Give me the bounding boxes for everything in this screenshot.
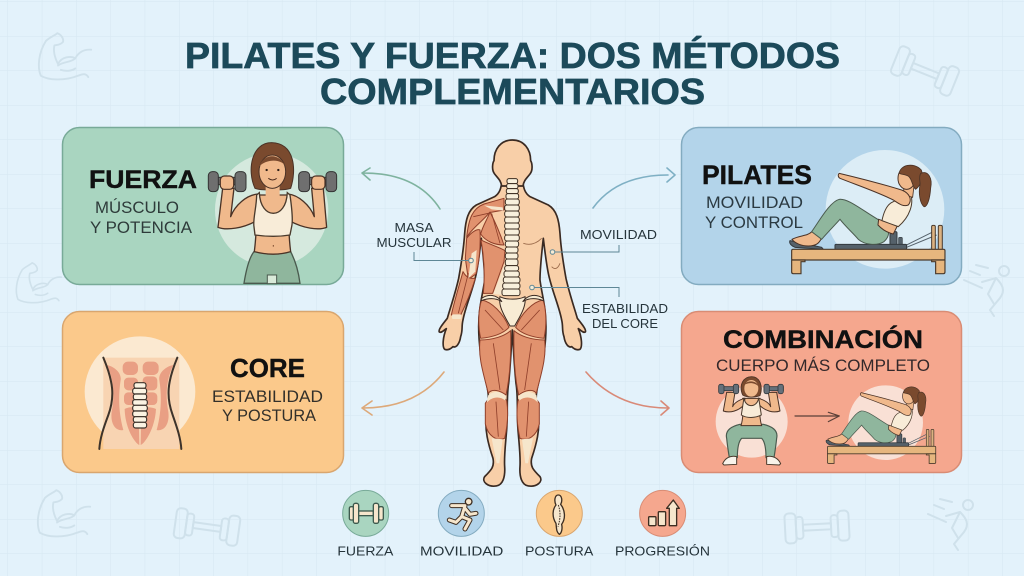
muscles: left back and arm [451,198,546,439]
central anatomy figure [439,140,586,486]
title: PILATES Y FUERZA: DOS MÉTODOS [185,35,840,76]
legend: movilidad [420,490,503,559]
text: estabilidad y postura: ESTABILIDAD [212,388,323,406]
panel: pilates [682,128,962,284]
text: estabilidad y postura [212,388,323,425]
tendons and bones highlights [452,205,538,463]
heading: fuerza: FUERZA [89,166,197,194]
illustration: squat and reformer sequence [716,377,936,465]
legend row [337,490,710,559]
label: estabilidad del core: ESTABILIDAD [582,301,668,316]
legend: progresión [615,490,710,559]
heading: core: CORE [230,353,305,383]
arrow: sequence [795,412,839,422]
text: movilidad y control: MOVILIDAD [706,194,803,212]
text: estabilidad y postura: Y POSTURA [222,407,316,425]
panel: fuerza [62,128,344,284]
figure: woman on reformer [826,385,936,463]
label: masa muscular: MUSCULAR [376,235,452,250]
spine [502,179,520,296]
legend: postura: POSTURA [525,544,593,559]
body silhouette [439,180,586,486]
arrow: to pilates [593,168,675,208]
illustration: woman lifting dumbbells [208,143,337,284]
arrow: to combinación [586,372,669,415]
label: estabilidad del core: DEL CORE [592,316,658,331]
legend: postura [525,490,593,559]
heading: combinación: COMBINACIÓN [723,324,923,354]
figure: woman squatting with dumbbells [716,377,788,465]
arrow: to fuerza [362,168,440,209]
illustration: woman on reformer [790,150,945,274]
label: masa muscular [376,220,473,263]
text: movilidad y control [705,194,803,232]
legend: progresión: PROGRESIÓN [615,544,710,559]
arrow: to core [362,372,444,415]
text: músculo y potencia: Y POTENCIA [90,219,192,237]
head [493,140,532,186]
label: movilidad [550,227,657,254]
title [185,35,840,112]
label: masa muscular: MASA [394,220,434,235]
muscle fibre lines [458,213,540,437]
text: músculo y potencia: MÚSCULO [95,198,179,217]
legend: fuerza: FUERZA [337,544,393,559]
text: cuerpo más completo: CUERPO MÁS COMPLETO [716,356,930,375]
right side details [523,238,560,269]
pelvis [481,295,543,326]
panel: core [62,312,344,472]
text: movilidad y control: Y CONTROL [705,214,803,232]
title: COMPLEMENTARIOS [320,71,705,112]
label: movilidad: MOVILIDAD [580,227,657,242]
label: estabilidad del core [530,285,668,331]
panel: combinación [682,312,962,472]
illustration: abdominal core and spine [85,336,195,449]
text: músculo y potencia [90,198,192,237]
legend: fuerza [337,490,393,559]
legend: movilidad: MOVILIDAD [420,544,503,559]
heading: pilates: PILATES [702,160,812,190]
